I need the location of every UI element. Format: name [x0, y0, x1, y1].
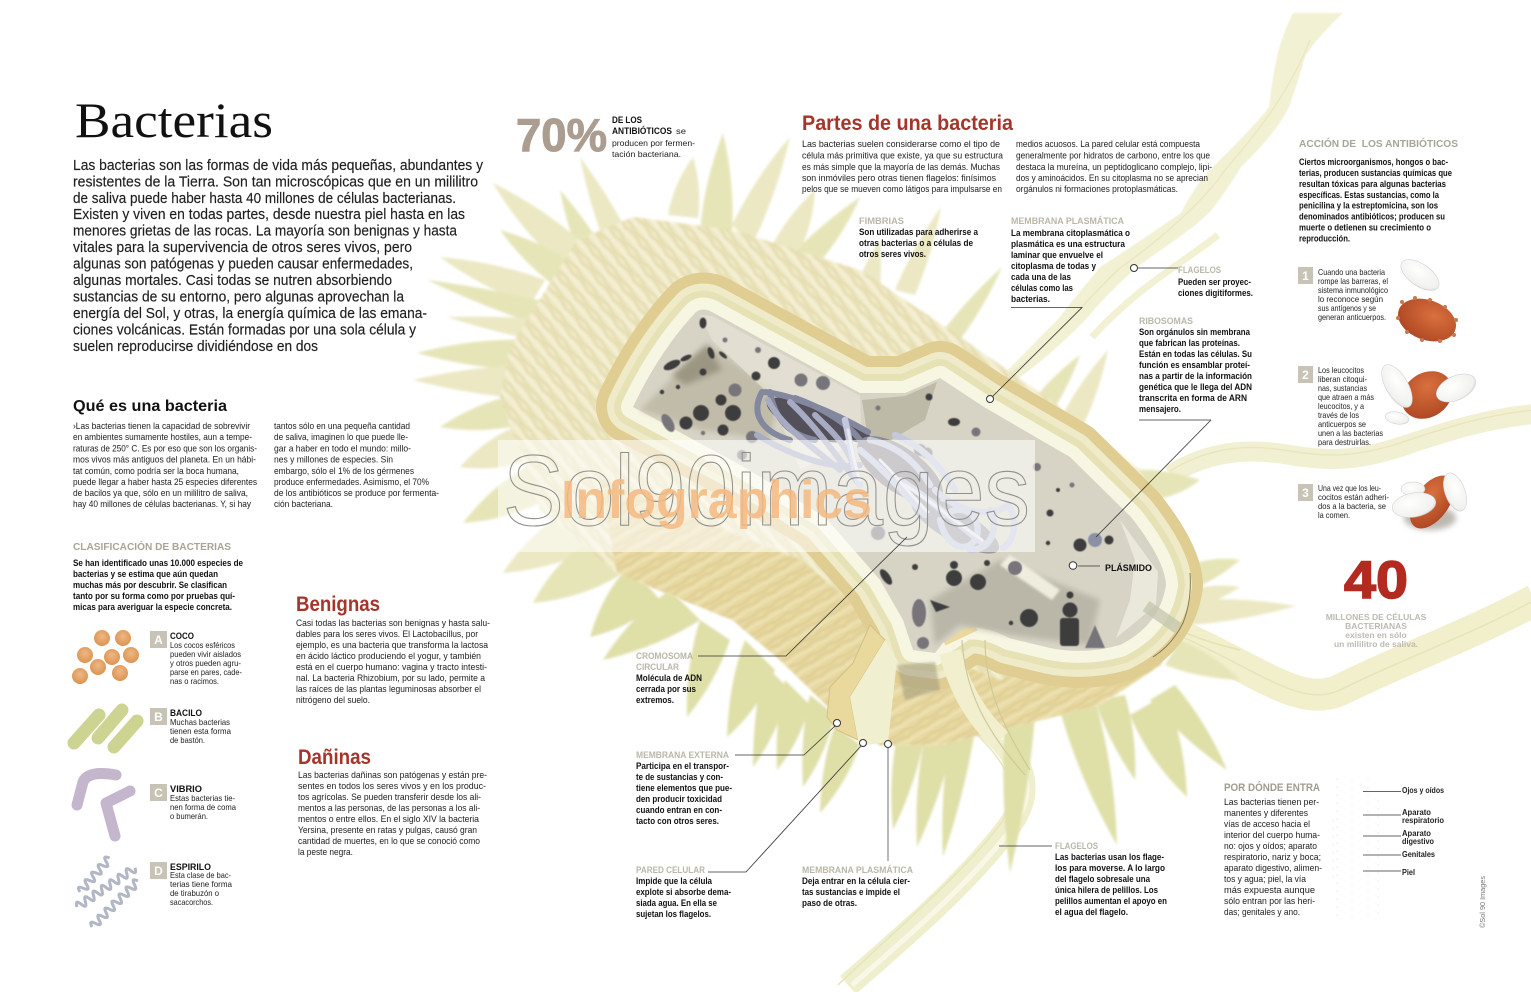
step 1: sus antígenos y se [1318, 303, 1376, 313]
callout: membrana externa: tacto con otros seres. [636, 815, 719, 826]
callout: ribosomas: que fabrican las proteínas. [1139, 337, 1240, 348]
step 2: Los leucocitos [1318, 365, 1364, 375]
item D: espirilo: terias tiene forma [170, 879, 232, 889]
panel: por donde entra [1224, 778, 1444, 920]
step 2: para destruirlas. [1318, 437, 1371, 447]
body entry labels: Ojos y oídos [1402, 786, 1444, 795]
section: que es una bacteria [73, 398, 439, 509]
watermark: Sol90images [503, 435, 1030, 547]
callout: plasmido [1069, 562, 1152, 573]
callout: flagelos inferior: del flagelo sobresale una [1055, 873, 1151, 884]
callout: ribosomas [1096, 316, 1252, 537]
column two: dos y aminoácidos. En su citoplasma no se aprecian [1016, 172, 1208, 183]
callout: ribosomas: Son orgánulos sin membrana [1139, 326, 1251, 337]
column one [73, 420, 257, 509]
callout: membrana plasmatica inferior: tas sustancias e impide el [802, 886, 900, 897]
callout: flagelos inferior: el agua del flagelo. [1055, 906, 1128, 917]
heading: Partes de una bacteria [802, 112, 1013, 135]
column two: produce enfermedades. Asimismo, el 70% [274, 476, 429, 487]
callout: fimbrias: otras bacterias o a células de [859, 237, 973, 248]
callout: plasmido: PLÁSMIDO [1105, 563, 1152, 573]
intro text: vitales para la supervivencia de otros seres vivos, pero [73, 240, 412, 256]
item C: vibrio: nen forma de coma [170, 802, 236, 812]
lead text: terias, producen sustancias químicas que [1299, 167, 1452, 178]
callout: flagelos superior [1130, 264, 1253, 298]
intro text [73, 158, 484, 355]
callout: pared celular: sujetan los flagelos. [636, 908, 711, 919]
lower flap of the cut wall [827, 625, 940, 745]
item D: espirilo [150, 862, 232, 907]
lead text: micas para averiguar la especie concreta. [73, 601, 232, 612]
callout: membrana plasmatica superior: cada una de las [1011, 271, 1071, 282]
lead text: tanto por su forma como por pruebas quí- [73, 590, 235, 601]
text block: cantidad de muertes, en lo que se conoció como [298, 835, 480, 846]
text block: nal. La bacteria Rhizobium, por su lado, permite a [296, 672, 486, 683]
body entry labels: Aparato [1402, 829, 1431, 838]
item D: espirilo: ESPIRILO [170, 862, 211, 872]
text block: manentes y diferentes [1224, 807, 1308, 818]
callout: membrana externa: te de sustancias y con- [636, 771, 723, 782]
step 1: 1 [1302, 269, 1309, 283]
callout: ribosomas: mensajero. [1139, 403, 1181, 414]
text block: las raíces de las plantas leguminosas absorber el [296, 683, 481, 694]
lead text [1299, 156, 1452, 244]
callout: flagelos inferior: pelillos aumentan el apoyo en [1055, 895, 1167, 906]
heading: ACCIÓN DE LOS ANTIBIÓTICOS [1299, 137, 1458, 150]
text block: está en el cuerpo humano: vagina y tracto intesti- [296, 661, 487, 672]
callout: membrana plasmatica superior: laminar que envuelve el [1011, 249, 1103, 260]
text block [298, 769, 487, 857]
callout: membrana plasmatica inferior: MEMBRANA PLASMÁTICA [802, 865, 914, 875]
body entry labels: digestivo [1402, 837, 1434, 846]
item D: espirilo: D [154, 864, 163, 878]
column two: de saliva, imaginen lo que puede lle- [274, 431, 408, 442]
icon: espirilos [75, 855, 141, 930]
panel: benignas [296, 593, 490, 705]
furry cell body [500, 217, 1195, 745]
stat: 70%: 70% [516, 109, 607, 161]
heading: Dañinas [298, 746, 371, 769]
column two: nes y millones de especies. Sin [274, 454, 393, 465]
step 1: sistema inmunológico [1318, 285, 1388, 295]
callout: pared celular: Impide que la célula [636, 875, 713, 886]
item A: coco: COCO [170, 631, 194, 641]
callout: pared celular: siada agua. En ella se [636, 897, 717, 908]
text block: aparato digestivo, alimen- [1224, 862, 1322, 873]
callout: ribosomas: RIBOSOMAS [1139, 316, 1193, 326]
lead text: Ciertos microorganismos, hongos o bac- [1299, 156, 1448, 167]
text block: en ácido láctico produciendo el yogur, y también [296, 650, 481, 661]
cytoplasm chamber [633, 310, 1166, 653]
callout: ribosomas: función es ensamblar proteí- [1139, 359, 1250, 370]
intro text: energía del Sol, y otras, la energía química de las emana- [73, 306, 427, 322]
text block: Las bacterias dañinas son patógenas y están pre- [298, 769, 487, 780]
stat: 40 millones: MILLONES DE CÉLULAS [1326, 612, 1427, 622]
callout: flagelos inferior: única hilera de pelillos. Los [1055, 884, 1158, 895]
item B: bacilo: Muchas bacterias [170, 717, 230, 727]
column two: medios acuosos. La pared celular está compuesta [1016, 138, 1201, 149]
callout: fimbrias: otros seres vivos. [859, 248, 926, 259]
step 3: Una vez que los leu- [1318, 483, 1381, 493]
column one: son inmóviles pero otras tienen flagelos: finísimos [802, 172, 996, 183]
stat: 70%: tación bacteriana. [612, 149, 681, 159]
callout: pared celular: explote si absorbe dema- [636, 886, 731, 897]
body entry labels [1363, 786, 1444, 877]
body entry labels: respiratorio [1402, 816, 1444, 825]
intro text: suelen reproducirse dividiéndose en dos [73, 339, 318, 355]
heading: CLASIFICACIÓN DE BACTERIAS [73, 540, 231, 553]
intro text: Las bacterias son las formas de vida más pequeñas, abundantes y [73, 158, 484, 174]
stat: 40 millones [1326, 551, 1427, 649]
callout: membrana plasmatica superior: células como las [1011, 282, 1073, 293]
text block [1224, 796, 1322, 917]
intro text: resistentes de la Tierra. Son tan microscópicas que en un mililitro [73, 174, 478, 190]
column one: hay 40 millones de células bacterianas. Y, si hay [73, 498, 251, 509]
step 2: través de los [1318, 410, 1359, 420]
callout: membrana plasmatica superior [986, 216, 1130, 402]
item C: vibrio: C [154, 786, 163, 800]
illustration: bacterium [413, 133, 1296, 873]
column two [1016, 138, 1212, 194]
item B: bacilo: BACILO [170, 708, 202, 718]
step 2: 2 [1302, 368, 1309, 382]
step 2: leucocitos, y a [1318, 401, 1364, 411]
text block: Casi todas las bacterias son benignas y hasta salu- [296, 617, 490, 628]
column one: puede llegar a haber hasta 25 especies diferentes [73, 476, 257, 487]
callout: flagelos superior: ciones digitiformes. [1178, 287, 1253, 298]
text block: sentes en todos los seres vivos y en los produc- [298, 780, 486, 791]
text block: mentos o entre ellos. En el siglo XIV la bacteria [298, 813, 480, 824]
column two: gar a haber en todo el mundo: millo- [274, 442, 411, 453]
lead text: específicas. Estas sustancias, como la [1299, 189, 1440, 200]
column two [274, 420, 439, 509]
ribosomes [659, 318, 1114, 649]
callout: membrana plasmatica superior: MEMBRANA PLASMÁTICA [1011, 216, 1125, 226]
intro text: algunas son patógenas y pueden causar enfermedades, [73, 256, 413, 272]
text block: tos agrícolas. Se pueden transferir desde los ali- [298, 791, 481, 802]
text block: respiratorio, nariz y boca; [1224, 851, 1321, 862]
heading: POR DÓNDE ENTRA [1224, 781, 1320, 794]
column one: en ambientes sumamente hostiles, aun a tempe- [73, 431, 252, 442]
step 1: lo reconoce según [1318, 294, 1383, 304]
text block: das; genitales y ano. [1224, 906, 1300, 917]
intro text: ciones volcánicas. Están formadas por una sola célula y [73, 322, 417, 338]
panel: accion de los antibioticos [1298, 137, 1480, 536]
step 3: dos a la bacteria, se [1318, 501, 1386, 511]
callout: membrana plasmatica inferior: paso de otras. [802, 897, 857, 908]
text block: Las bacterias tienen per- [1224, 796, 1319, 807]
callout: membrana externa: cuando entran en con- [636, 804, 722, 815]
callout: ribosomas: transcrita en forma de ARN [1139, 392, 1247, 403]
text block: más expuesta aunque [1224, 884, 1315, 895]
callout: ribosomas: genética que le llega del ADN [1139, 381, 1252, 392]
body entry labels: Genitales [1402, 850, 1436, 859]
step 2: que atraen a más [1318, 392, 1374, 402]
icon: cocos [72, 630, 139, 684]
column two: embargo, sólo el 1% de los gérmenes [274, 465, 414, 476]
flagella roots through the lower wall [943, 625, 1030, 775]
item A: coco: A [154, 633, 163, 647]
callout: membrana plasmatica superior: bacterias. [1011, 293, 1050, 304]
item A: coco [150, 631, 242, 686]
column one [802, 138, 1004, 194]
step 1: generan anticuerpos. [1318, 312, 1386, 322]
lower tan fur [600, 480, 1190, 745]
item B: bacilo: B [154, 710, 163, 724]
callout: membrana plasmatica superior: plasmática es una estructura [1011, 238, 1126, 249]
column one: de bacilos ya que, sólo en un mililitro de saliva, [73, 487, 248, 498]
item B: bacilo [150, 708, 231, 745]
panel: dañinas [298, 746, 487, 857]
stat: 40 millones: un mililitro de saliva. [1334, 639, 1418, 649]
lead text: penicilina y la estreptomicina, son los [1299, 200, 1438, 210]
intro text: sustancias de su entorno, pero algunas aprovechan la [73, 290, 404, 306]
callout: flagelos inferior: Las bacterias usan los flage- [1055, 851, 1164, 862]
item D: espirilo: Esta clase de bac- [170, 870, 231, 880]
item C: vibrio: Estas bacterias tie- [170, 793, 235, 803]
column one: Las bacterias suelen considerarse como el tipo de [802, 138, 1000, 149]
item D: espirilo: de tirabuzón o [170, 888, 219, 898]
step 2 [1298, 365, 1383, 447]
flagellum base crossing the wall [1146, 606, 1178, 628]
icon: leucocitos fagocitando [1390, 468, 1471, 536]
stat: 70%: se [676, 126, 686, 136]
step 3 [1298, 483, 1389, 520]
lead text: denominados antibióticos; producen su [1299, 210, 1445, 222]
callout: membrana externa: tiene elementos que pue- [636, 782, 732, 793]
callout: membrana plasmatica inferior [802, 740, 914, 908]
callout: cromosoma circular: Molécula de ADN [636, 672, 702, 683]
item A: coco: y otros pueden agru- [170, 658, 241, 668]
stat: 40 millones: existen en sólo [1345, 630, 1407, 640]
text block [296, 617, 490, 705]
column two: destaca la mureína, un peptidoglicano complejo, lipi- [1016, 161, 1212, 172]
text block: nitrógeno del suelo. [296, 694, 370, 705]
icon: leucocito y bacteria [1392, 253, 1462, 349]
stat: 70%: producen por fermen- [612, 138, 695, 148]
item B: bacilo: de bastón. [170, 735, 205, 745]
stat: 70% [516, 109, 695, 161]
cell wall layers [633, 310, 1166, 653]
step 3: la comen. [1318, 510, 1350, 520]
column one: raturas de 250° C. Es por eso que son los organis- [73, 442, 257, 453]
body entry labels: Aparato [1402, 808, 1431, 817]
text block: Yersina, presente en ratas y pulgas, causó gran [298, 824, 477, 835]
lead text: bacterias y se estima que aún quedan [73, 568, 218, 579]
callout: flagelos superior: Pueden ser proyec- [1178, 276, 1251, 287]
icon: vibrios [77, 774, 130, 836]
stat: 70%: DE LOS [612, 115, 642, 125]
step 1: Cuando una bacteria [1318, 267, 1385, 277]
intro text: algunas mortales. Casi todas se nutren absorbiendo [73, 273, 392, 289]
outer wall edge line [1153, 573, 1190, 657]
item A: coco: Los cocos esféricos [170, 640, 235, 650]
text block: tos y agua; piel, la vía [1224, 873, 1307, 884]
callout: flagelos inferior [999, 841, 1167, 917]
item C: vibrio: o bumerán. [170, 811, 208, 821]
text block: ejemplo, es una bacteria que transforma la lactosa [296, 639, 489, 650]
step 2: liberan citoqui- [1318, 374, 1367, 384]
stat: 40 millones: 40 [1344, 551, 1408, 610]
column two: orgánulos ni formaciones protoplasmáticas. [1016, 183, 1178, 194]
column one: mos vivos más antiguos del planeta. En un hábi- [73, 454, 256, 465]
callout: flagelos inferior: los para moverse. A lo largo [1055, 862, 1165, 873]
column one: célula más primitiva que existe, ya que su estructura [802, 150, 1004, 160]
column one: es más simple que la mayoría de las demás. Muchas [802, 161, 1000, 172]
title: Bacterias [75, 92, 273, 148]
lead text: muerte o detienen su crecimiento o [1299, 222, 1431, 232]
text block: interior del cuerpo huma- [1224, 829, 1320, 840]
text block: no: ojos y oídos; aparato [1224, 840, 1317, 851]
body entry labels: Piel [1402, 868, 1415, 877]
callout: pared celular [636, 740, 866, 919]
callout: fimbrias: FIMBRIAS [859, 216, 904, 226]
stat: 40 millones: BACTERIANAS [1345, 621, 1407, 631]
lead text: reproducción. [1299, 232, 1350, 244]
item C: vibrio: VIBRIO [170, 784, 202, 794]
step 1: rompe las barreras, el [1318, 276, 1388, 286]
callout: membrana plasmatica superior: La membrana citoplasmática o [1011, 227, 1130, 238]
callout: ribosomas: nas a partir de la información [1139, 370, 1252, 381]
step 3: cocitos están adheri- [1318, 492, 1389, 502]
callout: flagelos superior: FLAGELOS [1178, 265, 1221, 275]
item A: coco: parse en pares, cade- [170, 667, 242, 677]
column one: ›Las bacterias tienen la capacidad de sobrevivir [73, 420, 250, 431]
lead text: resultan tóxicas para algunas bacterias [1299, 178, 1446, 189]
icon: leucocitos uniendose [1375, 360, 1480, 429]
callout: membrana externa [636, 720, 840, 826]
callout: fimbrias [859, 216, 979, 259]
item C: vibrio [150, 784, 236, 821]
callout: cromosoma circular: cerrada por sus [636, 683, 696, 694]
callout: membrana externa: Participa en el transpor- [636, 760, 729, 771]
panel: partes de una bacteria [802, 112, 1212, 194]
heading: Benignas [296, 593, 380, 616]
intro text: Existen y viven en todas partes, desde nuestra piel hasta en las [73, 207, 465, 223]
spikes around the body [413, 133, 1296, 873]
heading: Qué es una bacteria [73, 398, 227, 415]
text block: dables para los seres vivos. El Lactobacillus, por [296, 628, 478, 639]
text block: mentos a las personas, de las personas a los ali- [298, 802, 480, 813]
item B: bacilo: tienen esta forma [170, 726, 231, 736]
step 2: anticuerpos se [1318, 419, 1366, 429]
text block: sólo entran por las heri- [1224, 895, 1315, 906]
panel: clasificacion de bacterias [72, 540, 243, 930]
credit: ©Sol 90 Images [1478, 876, 1487, 928]
column two: ción bacteriana. [274, 498, 333, 509]
lead text: muchas más por descubrir. Se clasifican [73, 579, 227, 590]
column two: tantos sólo en una pequeña cantidad [274, 420, 410, 431]
callout: fimbrias: Son utilizadas para adherirse a [859, 226, 979, 237]
step 3: 3 [1302, 486, 1309, 500]
step 2: nas, sustancias [1318, 383, 1367, 393]
illustration: flagella bands [838, 13, 1531, 985]
callout: membrana plasmatica superior: citoplasma de todas y [1011, 260, 1097, 271]
step 1 [1298, 267, 1388, 322]
callout: cromosoma circular: CROMOSOMA [636, 651, 694, 661]
callout: membrana externa: MEMBRANA EXTERNA [636, 750, 730, 760]
stat: 70%: ANTIBIÓTICOS [612, 125, 672, 136]
lead text: Se han identificado unas 10.000 especies de [73, 557, 243, 568]
item A: coco: nas o racimos. [170, 676, 219, 686]
callout: cromosoma circular: CIRCULAR [636, 662, 680, 672]
step 2: unen a las bacterias [1318, 428, 1383, 438]
callout: cromosoma circular [636, 537, 907, 705]
watermark: Infographics [561, 470, 872, 530]
callout: pared celular: PARED CELULAR [636, 865, 706, 875]
intro text: de saliva puede haber hasta 40 millones de células bacterianas. [73, 191, 456, 207]
callout: ribosomas: Están en todas las células. Su [1139, 348, 1252, 359]
column one: tat común, como podría ser la boca humana, [73, 465, 239, 476]
column two: generalmente por hidratos de carbono, entre los que [1016, 150, 1210, 160]
callout: flagelos inferior: FLAGELOS [1055, 841, 1098, 851]
text block: la peste negra. [298, 846, 353, 857]
item A: coco: pueden vivir aislados [170, 649, 241, 659]
callout: membrana externa: den producir toxicidad [636, 793, 722, 804]
column one: pelos que se mueven como látigos para impulsarse en [802, 183, 1002, 194]
lead text [73, 557, 243, 612]
circular chromosome coil [757, 389, 1014, 564]
callout: cromosoma circular: extremos. [636, 694, 674, 705]
icon: bacilos [74, 710, 137, 747]
intro text: menores grietas de las rocas. La mayoría son benignas y hasta [73, 224, 457, 240]
item D: espirilo: sacacorchos. [170, 897, 213, 907]
chamber shading [640, 315, 1158, 645]
column two: de los antibióticos se produce por fermenta- [274, 487, 439, 498]
callout: membrana plasmatica inferior: Deja entrar en la célula cier- [802, 875, 910, 886]
text block: vías de acceso hacia el [1224, 818, 1310, 829]
faint human figure [1333, 778, 1378, 920]
